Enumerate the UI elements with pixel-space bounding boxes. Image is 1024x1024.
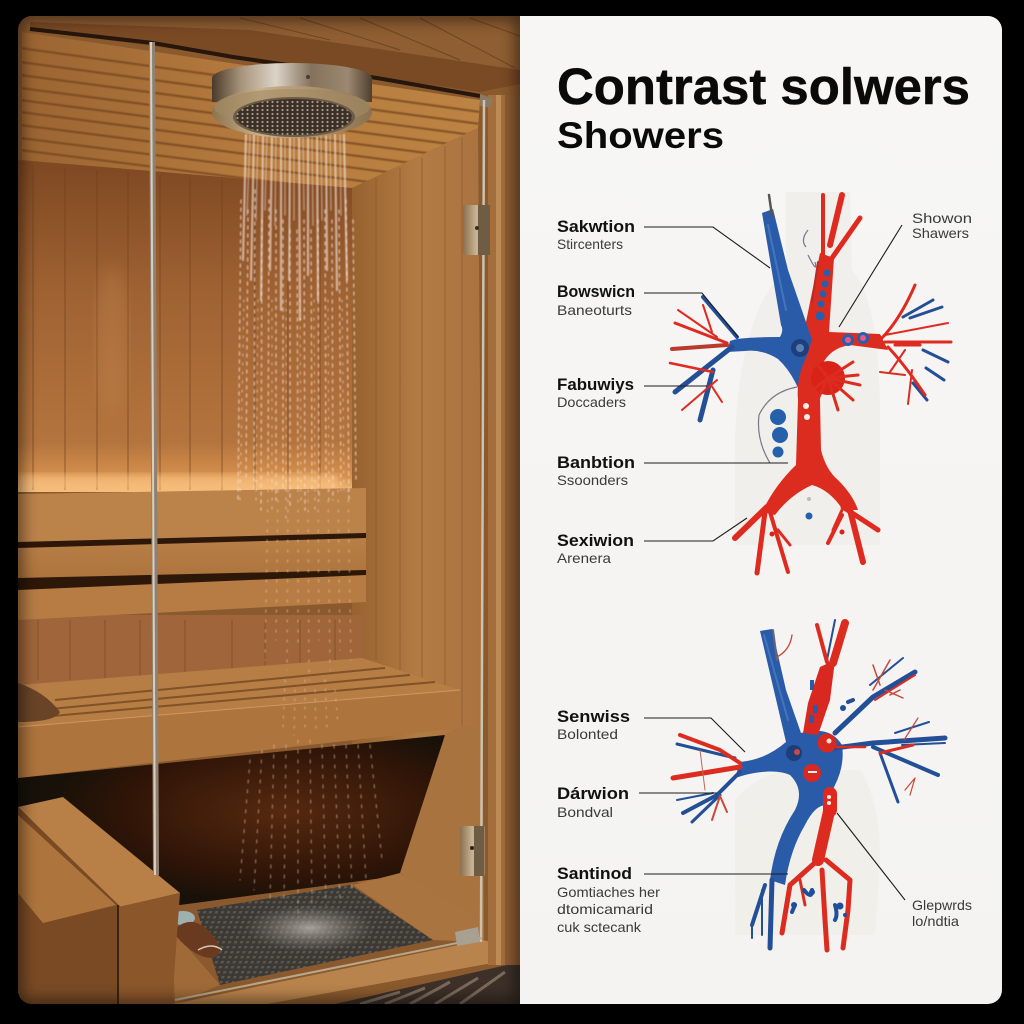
blue cells xyxy=(770,270,869,536)
ceiling beam xyxy=(30,22,520,92)
label: Santinod: cuk sctecank xyxy=(557,919,642,935)
label: Fabuwiys xyxy=(557,375,634,410)
label: Bowswicn: Bowswicn xyxy=(557,282,635,301)
panel: sauna photograph xyxy=(14,12,524,1008)
label: Sexiwion: Arenera xyxy=(557,550,611,566)
label: Darwion: Dárwion xyxy=(557,784,629,803)
subtitle: Showers xyxy=(557,115,724,156)
label: Sakwtion: Sakwtion xyxy=(557,217,635,236)
space under bench xyxy=(18,735,445,905)
label: Sexiwion: Sexiwion xyxy=(557,531,634,550)
label: Fabuwiys: Doccaders xyxy=(557,394,626,410)
label: Fabuwiys: Fabuwiys xyxy=(557,375,634,394)
photo vignette xyxy=(14,12,524,1008)
label: Senwiss xyxy=(557,707,630,742)
blue vessels xyxy=(675,195,948,420)
leader lines xyxy=(639,225,905,900)
label: Santinod: Gomtiaches her xyxy=(557,884,660,900)
blue vessels lower xyxy=(677,620,945,948)
backrest slats xyxy=(18,488,366,687)
label: Sakwtion xyxy=(557,217,635,252)
towel on bench xyxy=(18,683,60,722)
body silhouette upper xyxy=(742,192,880,417)
sill xyxy=(173,940,520,1004)
label: Glepwrds: lo/ndtia xyxy=(912,913,959,929)
outer floor mat xyxy=(335,962,520,1004)
label: Banbtion: Ssoonders xyxy=(557,472,628,488)
label: Banbtion: Banbtion xyxy=(557,453,635,472)
label: Showon Shawers: Shawers xyxy=(912,225,969,241)
back wall xyxy=(18,160,355,492)
hinge upper xyxy=(463,205,490,255)
water: falling streams xyxy=(238,135,382,920)
ceiling wood above rail xyxy=(22,16,32,20)
label: Bowswicn xyxy=(557,282,635,318)
label: Banbtion xyxy=(557,453,635,488)
label: Santinod xyxy=(557,864,660,935)
ceiling planks xyxy=(22,32,480,188)
label: Showon Shawers xyxy=(912,210,972,241)
thin wires xyxy=(758,230,816,463)
label: Sakwtion: Stircenters xyxy=(557,236,623,252)
label: Darwion xyxy=(557,784,629,820)
red vessels xyxy=(670,195,951,573)
label: Glepwrds: Glepwrds xyxy=(912,897,972,913)
right side wall xyxy=(352,128,484,940)
upper vascular diagram xyxy=(670,192,951,573)
label: Bowswicn: Baneoturts xyxy=(557,302,632,318)
front bench xyxy=(18,797,180,1004)
door clip bottom xyxy=(455,927,480,946)
label: Santinod: Santinod xyxy=(557,864,632,883)
label: Santinod: dtomicamarid xyxy=(557,901,653,917)
body silhouette lower xyxy=(735,770,880,935)
vessel nodes lower xyxy=(786,680,847,920)
ceiling rail xyxy=(30,29,480,96)
lower vascular diagram xyxy=(673,620,945,950)
glass door edges xyxy=(151,42,484,1000)
title: Contrast solwers xyxy=(557,58,970,115)
door frame xyxy=(480,94,520,965)
hinge lower xyxy=(460,826,485,876)
label: Glepwrds xyxy=(912,897,972,929)
red vessels lower xyxy=(673,623,918,950)
red burst xyxy=(805,358,860,410)
floor wood xyxy=(353,873,480,942)
panel: diagram sheet xyxy=(520,16,1002,1004)
label: Showon Shawers: Showon xyxy=(912,210,972,226)
label: Senwiss: Senwiss xyxy=(557,707,630,726)
label: Senwiss: Bolonted xyxy=(557,726,618,742)
label: Darwion: Bondval xyxy=(557,804,613,820)
bench xyxy=(18,658,460,778)
label: Sexiwion xyxy=(557,531,634,566)
shower floor mat xyxy=(197,885,433,985)
slipper xyxy=(171,911,222,958)
shower head xyxy=(212,63,372,138)
